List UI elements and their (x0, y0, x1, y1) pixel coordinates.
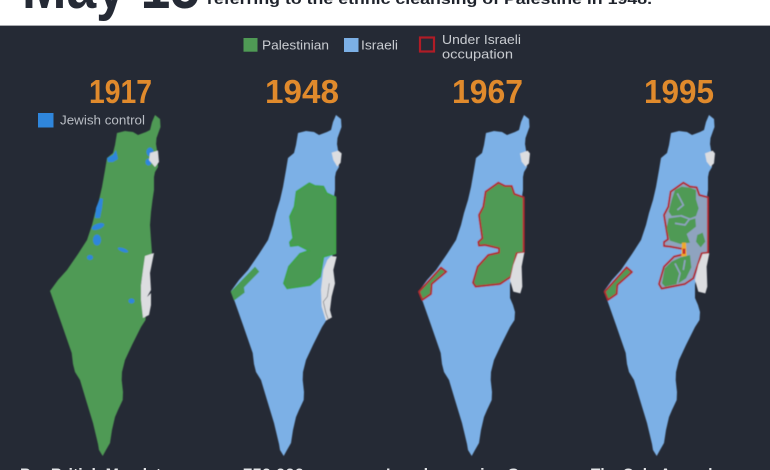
map 1967 (419, 73, 530, 456)
legend: Under Israeli occupation: occupation (442, 46, 513, 62)
legend: Palestinian: Palestinian (262, 38, 329, 52)
legend: Under Israeli occupation (420, 32, 521, 62)
Palestinian enclaves (662, 187, 705, 287)
Sea of Galilee (705, 151, 715, 167)
Jerusalem (681, 243, 687, 257)
land and features 1917 (50, 115, 160, 456)
West Bank occupied (473, 183, 524, 287)
year 1995: 1995 (644, 73, 714, 110)
year 1948: 1948 (265, 73, 339, 110)
Dead Sea line (323, 283, 329, 319)
Sea of Galilee (332, 151, 342, 167)
grey veins through enclaves (675, 193, 690, 284)
Sea of Galilee (520, 151, 530, 167)
legend (244, 32, 521, 62)
West Bank occupied (659, 183, 708, 289)
Sea of Galilee (149, 150, 159, 167)
Gaza occupied (419, 268, 446, 300)
land and features 1948 (231, 115, 342, 456)
land outline blue (231, 115, 342, 456)
land and features 1995 (604, 115, 715, 456)
Dead Sea (321, 256, 337, 321)
East Jerusalem marker (683, 249, 685, 254)
Dead Sea (141, 253, 154, 318)
Dead Sea (510, 253, 524, 293)
legend: Israeli (344, 38, 398, 52)
land outline blue (604, 115, 714, 456)
map 1995 (604, 73, 715, 456)
Gaza (231, 267, 259, 301)
West Bank (284, 183, 335, 288)
Dead Sea (695, 253, 709, 293)
year 1917: 1917 (89, 73, 152, 110)
map 1948 (231, 73, 342, 456)
legend: Jewish control: Jewish control (60, 112, 145, 128)
panel top edge (0, 25, 770, 26)
year 1967: 1967 (452, 73, 523, 110)
legend: Israeli: Israeli (361, 38, 398, 52)
map 1917 (38, 73, 160, 456)
legend: Under Israeli occupation: Under Israeli (442, 32, 521, 47)
land and features 1967 (419, 115, 530, 456)
Gaza occupied (605, 267, 632, 300)
land outline blue (419, 115, 530, 456)
land outline green (50, 115, 160, 456)
Jewish control patches (87, 148, 154, 304)
